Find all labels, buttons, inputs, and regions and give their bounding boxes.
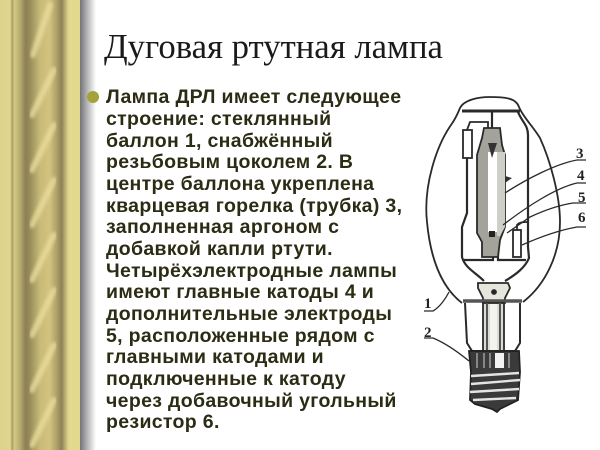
body text: подключенные к катоду [106,368,346,390]
body text: добавкой капли ртути. [106,238,333,260]
body text: имеют главные катоды 4 и [106,281,374,303]
body text: главными катодами и [106,346,324,368]
diagram: mercury lamp [424,96,586,414]
screw base [469,351,520,412]
body text: через добавочный угольный [106,390,397,412]
decorative gold column [0,0,95,450]
body text [106,86,402,433]
diagram: mercury lamp: 2 [424,325,432,341]
diagram: mercury lamp: 3 [576,146,584,162]
leader lines and labels [424,160,586,361]
diagram: mercury lamp: 1 [424,296,432,312]
body text: резистор 6. [106,411,220,433]
body text: дополнительные электроды [106,303,392,325]
body text: строение: стеклянный [106,108,331,130]
title: Дуговая ртутная лампа [104,27,443,66]
bulb frame [462,111,529,281]
body text: баллон 1, снабжённый [106,130,333,152]
diagram: mercury lamp: 6 [578,210,586,226]
body text: центре баллона укреплена [106,173,374,195]
body text: Лампа ДРЛ имеет следующее [106,86,401,108]
body text: заполненная аргоном с [106,216,339,238]
diagram: mercury lamp: 5 [578,190,586,206]
base neck and insulator [463,283,522,351]
body text: 5, расположенные рядом с [106,325,375,347]
glass bulb [426,97,560,303]
body text: резьбовым цоколем 2. В [106,151,353,173]
body text: кварцевая горелка (трубка) 3, [106,195,402,217]
body text: Четырёхэлектродные лампы [106,260,397,282]
bullet [87,91,99,103]
diagram: mercury lamp: 4 [577,168,585,184]
arc tube [477,128,512,257]
